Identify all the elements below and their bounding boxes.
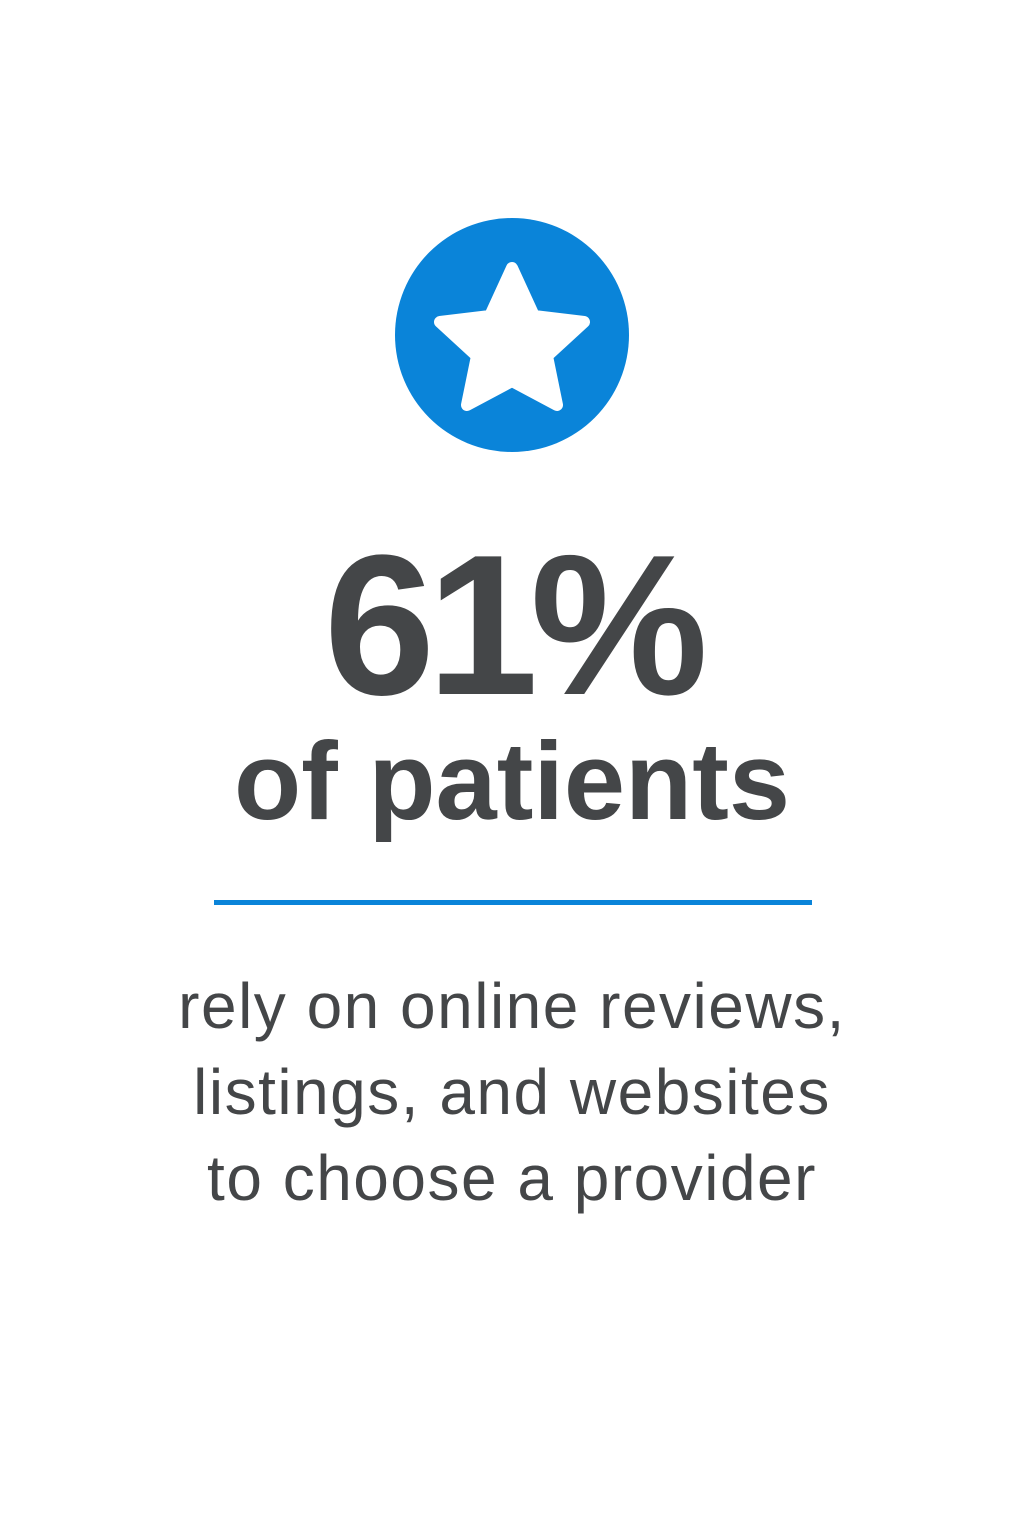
icon: star badge [395, 218, 629, 452]
description text: listings, and websites [193, 1056, 831, 1128]
description text: rely on online reviews, [178, 970, 846, 1042]
headline number: 61% [324, 514, 700, 737]
description text [178, 970, 846, 1214]
subheading: of patients [234, 720, 790, 843]
description text: to choose a provider [207, 1142, 817, 1214]
divider line [214, 900, 812, 905]
